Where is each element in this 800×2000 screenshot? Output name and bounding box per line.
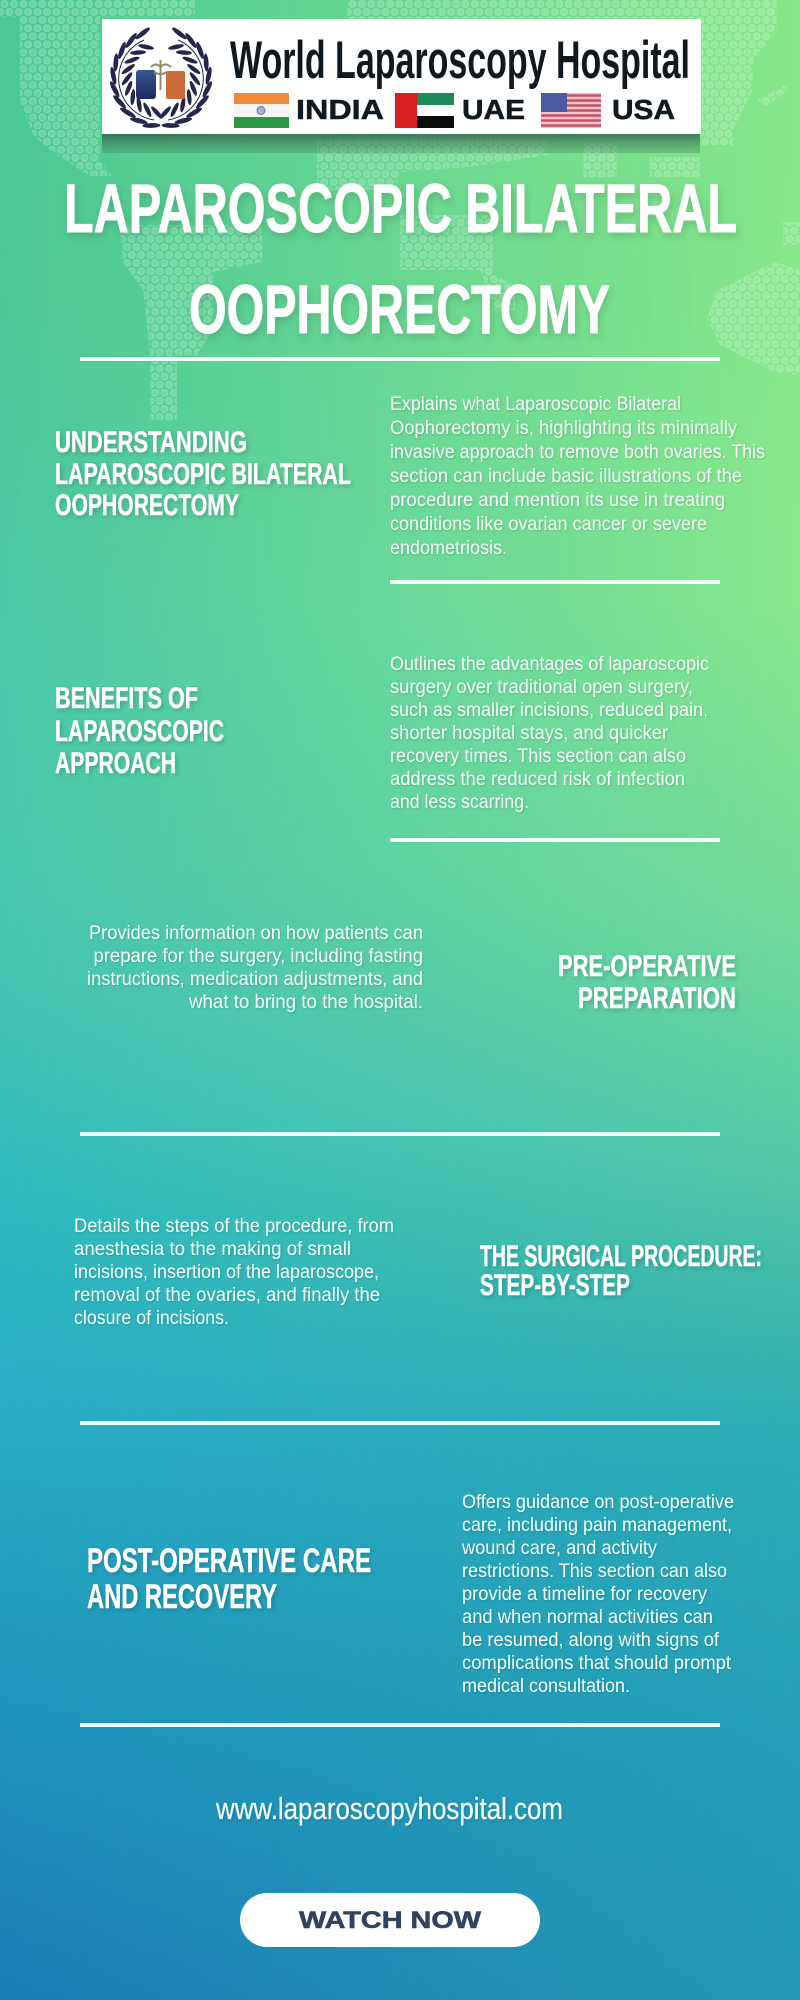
title (64, 170, 737, 348)
heading: benefits: LAPAROSCOPIC (55, 715, 224, 748)
label: USA: USA (612, 94, 675, 125)
heading: preparation (558, 950, 736, 1015)
heading: understanding: OOPHORECTOMY (55, 489, 239, 522)
heading: benefits: BENEFITS OF (55, 682, 198, 715)
text: preparation: prepare for the surgery, including fasting (94, 945, 423, 967)
text: procedure: closure of incisions. (74, 1307, 229, 1329)
text: recovery: be resumed, along with signs of (462, 1629, 720, 1651)
watch now button: WATCH NOW (299, 1907, 481, 1934)
heading: benefits (55, 682, 224, 780)
label: INDIA: INDIA (296, 94, 384, 125)
text: recovery: medical consultation. (462, 1675, 630, 1697)
text: procedure: removal of the ovaries, and finally the (74, 1284, 380, 1306)
text: benefits: address the reduced risk of infection (390, 768, 685, 790)
text: benefits: such as smaller incisions, reduced pain, (390, 699, 708, 721)
text: recovery: provide a timeline for recovery (462, 1583, 707, 1605)
heading: recovery: POST-OPERATIVE CARE (87, 1542, 371, 1580)
text: understanding: invasive approach to remove both ovaries. This (390, 441, 765, 463)
heading: procedure (480, 1240, 762, 1302)
panel: understanding (55, 393, 765, 584)
text: understanding: procedure and mention its use in treating (390, 489, 725, 511)
icon: laurel wreath emblem (106, 25, 216, 134)
heading: understanding: LAPAROSCOPIC BILATERAL (55, 458, 351, 491)
heading: understanding (55, 426, 351, 522)
panel: benefits (55, 653, 720, 842)
website url: www.laparoscopyhospital.com (215, 1791, 563, 1826)
text: understanding (390, 393, 765, 559)
text: procedure: incisions, insertion of the laparoscope, (74, 1261, 379, 1283)
panel: surgical procedure (74, 1215, 762, 1425)
text: benefits (390, 653, 709, 813)
text: recovery: Offers guidance on post-operative (462, 1491, 734, 1513)
text: procedure: anesthesia to the making of small (74, 1238, 351, 1260)
text: preparation: instructions, medication adjustments, and (87, 968, 423, 990)
text: preparation: Provides information on how patients can (89, 922, 423, 944)
divider under title (80, 357, 720, 361)
text: understanding: endometriosis. (390, 537, 507, 559)
heading: preparation: PRE-OPERATIVE (558, 950, 736, 983)
title: OOPHORECTOMY (189, 271, 610, 348)
heading: preparation: PREPARATION (578, 982, 736, 1015)
text: understanding: conditions like ovarian cancer or severe (390, 513, 707, 535)
text: preparation: what to bring to the hospital. (188, 991, 423, 1013)
heading: benefits: APPROACH (55, 747, 176, 780)
text: understanding: Oophorectomy is, highlighting its minimally (390, 417, 737, 439)
world map hex dot pattern (0, 0, 800, 420)
icon: flag of USA (541, 93, 601, 128)
heading: understanding: UNDERSTANDING (55, 426, 247, 459)
text: understanding: Explains what Laparoscopic Bilateral (390, 393, 681, 415)
text: recovery: wound care, and activity (461, 1537, 657, 1559)
text: benefits: shorter hospital stays, and quicker (390, 722, 668, 744)
logo shadow (102, 134, 700, 153)
logo banner (102, 19, 701, 153)
watch now button (240, 1893, 540, 1947)
text: preparation (87, 922, 423, 1013)
heading: recovery: AND RECOVERY (87, 1578, 277, 1616)
text: benefits: Outlines the advantages of laparoscopic (390, 653, 709, 675)
text: benefits: recovery times. This section can also (390, 745, 686, 767)
text: recovery (461, 1491, 734, 1697)
text: procedure: Details the steps of the procedure, from (74, 1215, 394, 1237)
heading: procedure: STEP-BY-STEP (480, 1269, 630, 1302)
label: UAE: UAE (462, 94, 525, 125)
text: understanding: section can include basic illustrations of the (390, 465, 742, 487)
logo white panel (102, 19, 701, 134)
heading: recovery (87, 1542, 371, 1616)
text: recovery: restrictions. This section can also (462, 1560, 727, 1582)
text: benefits: surgery over traditional open surgery, (390, 676, 693, 698)
panel: post-operative care (80, 1491, 734, 1727)
icon: flag of UAE (395, 93, 454, 128)
text: recovery: care, including pain management, (462, 1514, 732, 1536)
text: benefits: and less scarring. (390, 791, 529, 813)
text: recovery: and when normal activities can (462, 1606, 713, 1628)
icon: flag of India (234, 93, 289, 128)
text: procedure (74, 1215, 394, 1329)
panel: pre-operative preparation (80, 922, 736, 1136)
text: recovery: complications that should prompt (462, 1652, 732, 1674)
